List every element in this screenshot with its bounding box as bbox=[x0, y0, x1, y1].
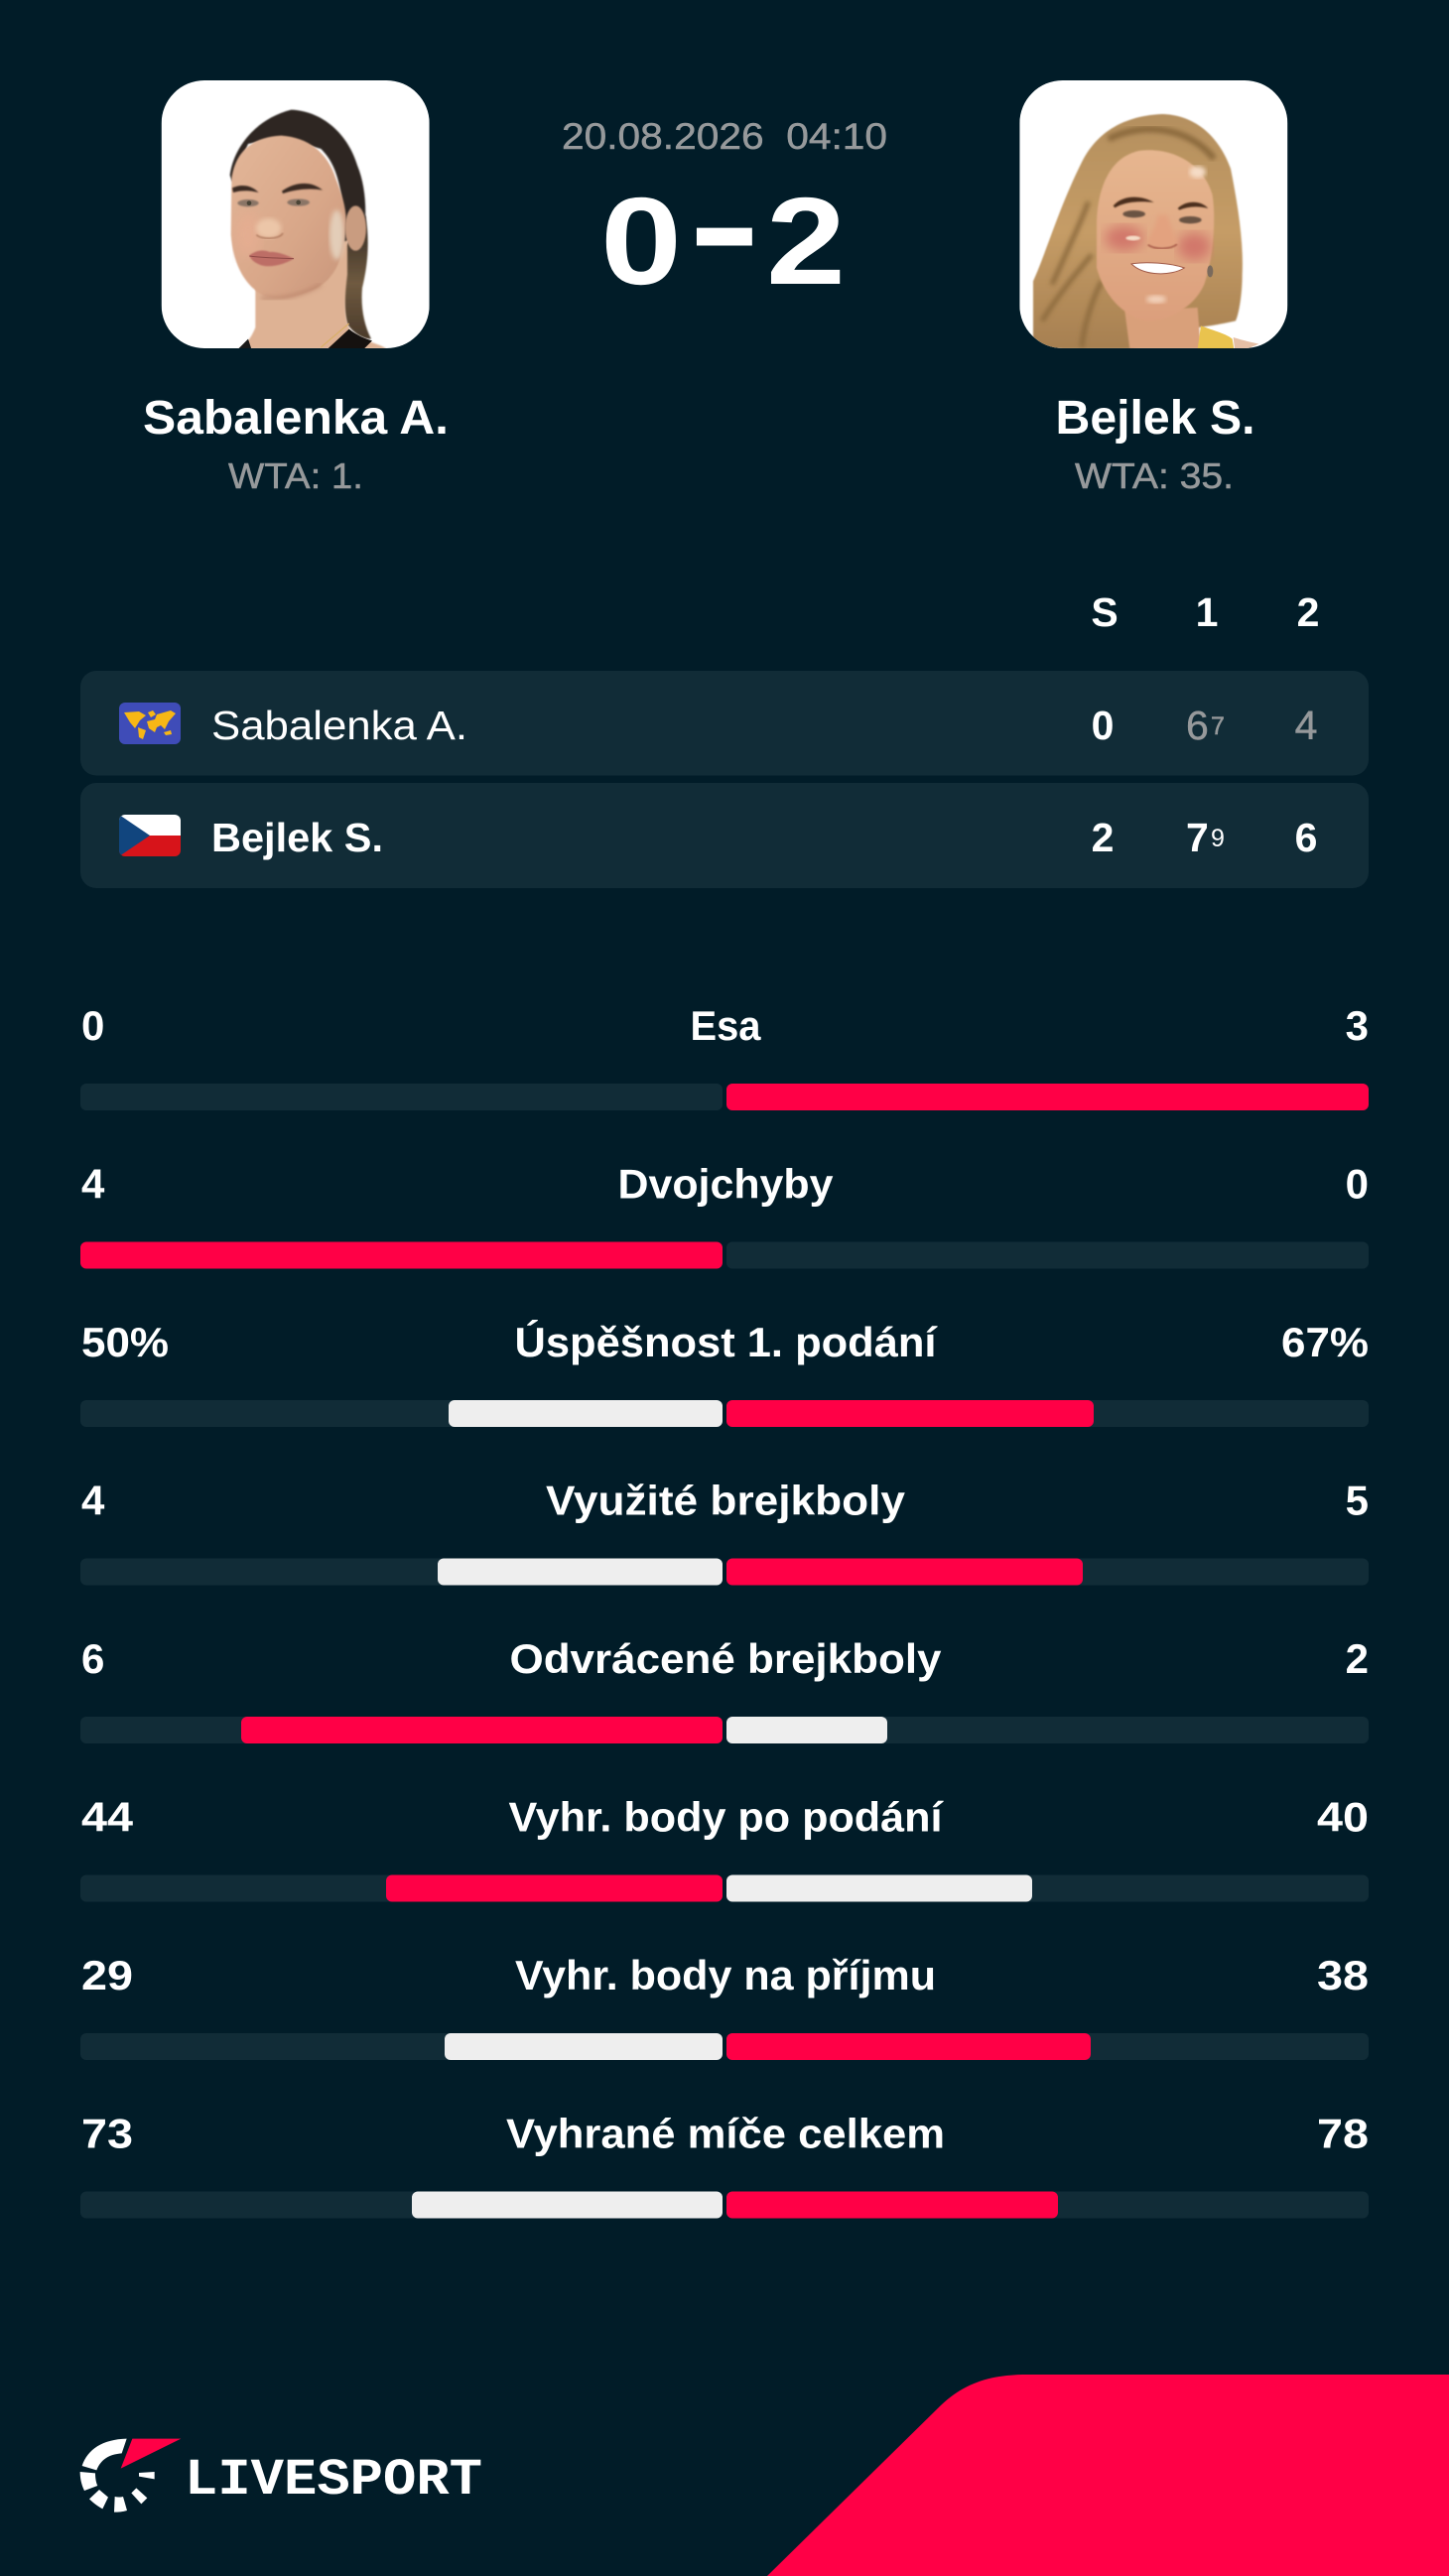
sets won: 0 bbox=[1092, 703, 1114, 748]
stat: Vyhrané míče celkem bbox=[80, 2110, 1369, 2219]
player name: Bejlek: Bejlek S. bbox=[1056, 392, 1254, 445]
stat: Vyhr. body po podání: 40 bbox=[1317, 1794, 1369, 1840]
icon: Czech flag bbox=[119, 815, 181, 856]
match score bbox=[600, 158, 846, 311]
stat: Vyhr. body na příjmu: Vyhr. body na příjmu bbox=[515, 1952, 936, 1998]
stat: Využité brejkboly: 4 bbox=[81, 1477, 105, 1524]
stat: Vyhrané míče celkem: Vyhrané míče celkem bbox=[506, 2110, 945, 2157]
set 1 score: 7 bbox=[1186, 815, 1209, 860]
match score: - bbox=[691, 158, 758, 296]
ranking: Sabalenka: WTA: 1. bbox=[228, 455, 363, 496]
sets won: 2 bbox=[1092, 815, 1114, 860]
stat: Úspěšnost 1. podání bbox=[80, 1318, 1369, 1427]
scoreboard column headers: 2 bbox=[1297, 589, 1319, 635]
set 2 score: 4 bbox=[1295, 703, 1317, 748]
stat: Odvrácené brejkboly: 6 bbox=[81, 1635, 104, 1682]
set 1 tiebreak: 9 bbox=[1211, 825, 1225, 852]
footer red shape bbox=[767, 2375, 1449, 2576]
scoreboard row: Bejlek bbox=[80, 783, 1369, 888]
set 1 tiebreak: 7 bbox=[1211, 712, 1225, 740]
stat: Esa: Esa bbox=[691, 1002, 761, 1049]
stat: Dvojchyby: 0 bbox=[1346, 1161, 1369, 1207]
stat: Vyhr. body po podání: 44 bbox=[81, 1794, 134, 1840]
stat: Úspěšnost 1. podání: 67% bbox=[1281, 1319, 1369, 1365]
ranking: Bejlek: WTA: 35. bbox=[1075, 455, 1234, 496]
scoreboard row: Sabalenka bbox=[80, 671, 1369, 776]
stat: Dvojchyby: 4 bbox=[81, 1161, 105, 1207]
player name: Sabalenka: Sabalenka A. bbox=[143, 392, 449, 445]
stat: Vyhr. body po podání: Vyhr. body po podání bbox=[508, 1794, 944, 1840]
player name: Sabalenka bbox=[143, 392, 449, 496]
scoreboard column headers: S bbox=[1091, 589, 1119, 635]
stat: Úspěšnost 1. podání: 50% bbox=[81, 1319, 169, 1365]
stat: Využité brejkboly bbox=[80, 1477, 1369, 1586]
stat: Dvojchyby: Dvojchyby bbox=[617, 1161, 834, 1207]
match score: 0 bbox=[600, 173, 682, 311]
set 2 score: 6 bbox=[1295, 815, 1317, 860]
stat: Esa: 3 bbox=[1346, 1002, 1369, 1049]
scoreboard column headers bbox=[1091, 589, 1319, 635]
stat: Vyhr. body po podání bbox=[80, 1794, 1369, 1901]
match score: 2 bbox=[766, 173, 846, 311]
scoreboard column headers: 1 bbox=[1196, 589, 1218, 635]
stat: Odvrácené brejkboly bbox=[80, 1635, 1369, 1743]
stat: Vyhrané míče celkem: 73 bbox=[81, 2110, 133, 2157]
stat: Odvrácené brejkboly: 2 bbox=[1346, 1635, 1369, 1682]
stat: Odvrácené brejkboly: Odvrácené brejkboly bbox=[510, 1635, 942, 1682]
player name: Bejlek bbox=[1056, 392, 1254, 496]
stat: Esa: 0 bbox=[81, 1002, 104, 1049]
stat: Vyhrané míče celkem: 78 bbox=[1317, 2110, 1369, 2157]
wordmark: LIVESPORT bbox=[185, 2451, 482, 2510]
player name: Sabalenka A. bbox=[211, 703, 467, 748]
player photo: Sabalenka bbox=[161, 80, 430, 348]
stat: Vyhr. body na příjmu: 29 bbox=[81, 1952, 133, 1998]
Livesport logo bbox=[80, 2439, 482, 2512]
stat: Esa bbox=[80, 1002, 1369, 1110]
icon: world flag bbox=[119, 703, 181, 744]
stat: Vyhr. body na příjmu: 38 bbox=[1317, 1952, 1369, 1998]
stat: Využité brejkboly: Využité brejkboly bbox=[546, 1477, 906, 1524]
icon: Livesport speedometer bbox=[79, 2439, 181, 2512]
player name: Bejlek S. bbox=[211, 815, 383, 860]
stat: Dvojchyby bbox=[80, 1161, 1369, 1268]
stat: Vyhr. body na příjmu bbox=[80, 1952, 1369, 2060]
date and time: 20.08.2026 04:10 bbox=[562, 116, 887, 157]
stat: Úspěšnost 1. podání: Úspěšnost 1. podání bbox=[514, 1318, 938, 1365]
stat: Využité brejkboly: 5 bbox=[1346, 1477, 1369, 1524]
player photo: Bejlek bbox=[1019, 80, 1288, 348]
set 1 score: 6 bbox=[1186, 703, 1209, 748]
